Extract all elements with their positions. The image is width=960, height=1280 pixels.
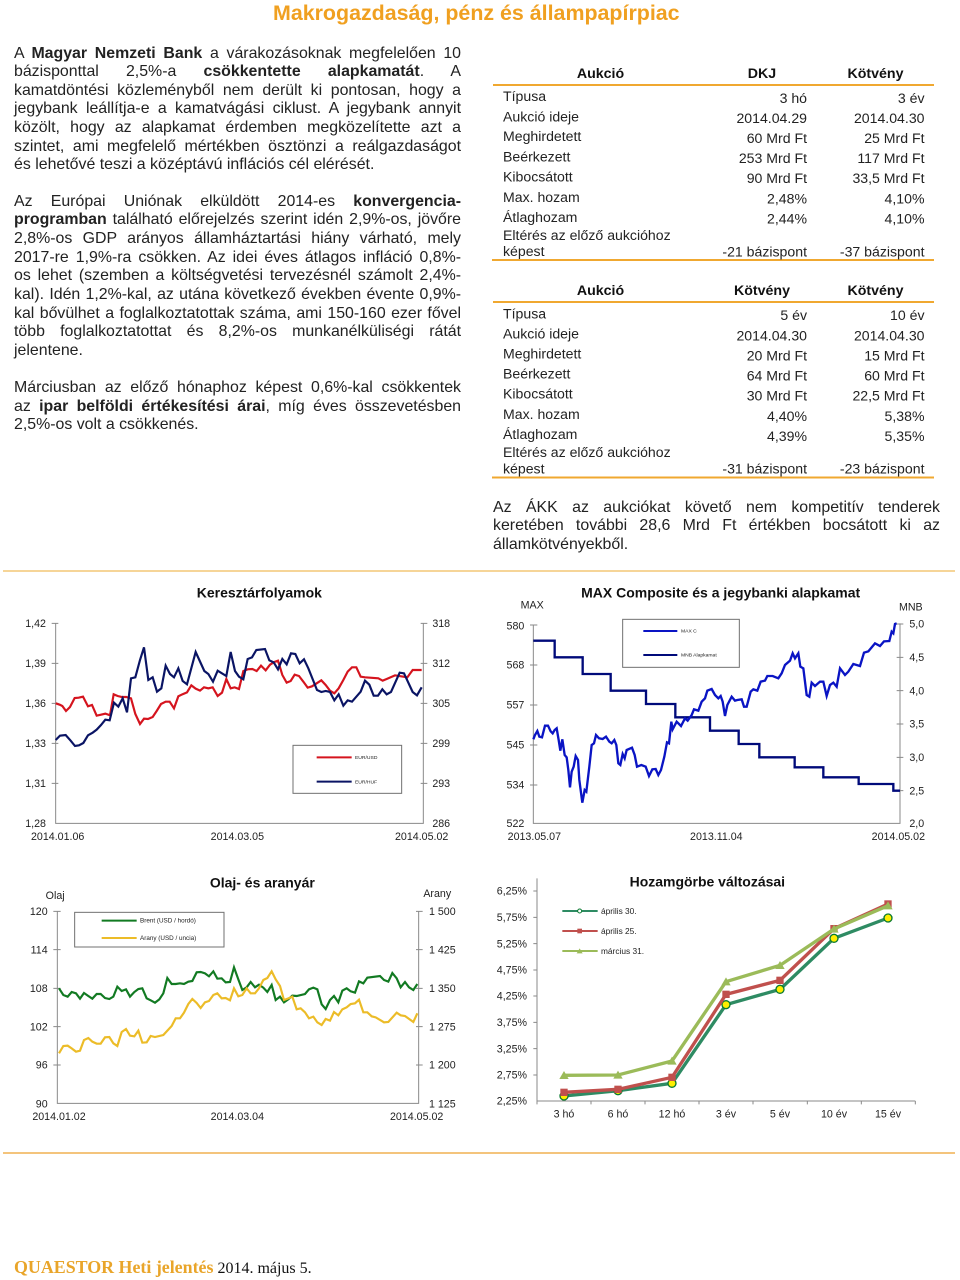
right axis labels — [909, 619, 924, 830]
right axis labels: 1 500 — [429, 906, 456, 918]
right axis labels: 305 — [432, 698, 450, 710]
left axis labels: 114 — [31, 944, 48, 956]
column 5-year values: 64 Mrd Ft — [747, 368, 807, 384]
legend: Brent (USD / hordó) — [140, 918, 196, 925]
date labels: 2014.05.02 — [390, 1111, 443, 1123]
column 5-year values: 20 Mrd Ft — [747, 347, 807, 363]
text block: MNB rate decision: szintet, ami megfelelő mértékben ösztönzi a reálgazdaságot — [14, 138, 461, 155]
right axis labels: 3,0 — [909, 752, 924, 764]
legend: április 30. — [601, 906, 637, 916]
date labels — [32, 1111, 443, 1123]
series: március 31. — [559, 901, 893, 1079]
chart title: Hozamgörbe változásai — [630, 874, 785, 890]
row labels: Kibocsátott — [503, 386, 573, 402]
left axis labels — [507, 620, 524, 830]
date labels — [508, 831, 925, 843]
text block: convergence programme: Az Európai Uniónak elküldött 2014-es konvergencia- — [14, 193, 461, 210]
left axis labels: 1,39 — [25, 658, 46, 670]
column 10-year values: 60 Mrd Ft — [864, 368, 925, 384]
x axis labels — [554, 1108, 902, 1120]
row labels: képest — [503, 243, 545, 259]
line: EUR/HUF — [56, 647, 422, 746]
text block: MNB rate decision — [14, 44, 461, 173]
legend — [623, 619, 739, 667]
left axis labels: 1,36 — [25, 698, 46, 710]
column 10-year values: 2014.04.30 — [854, 327, 925, 343]
table header: Aukció — [577, 66, 624, 82]
column DKJ values: 2,44% — [767, 210, 807, 226]
right axis labels: 286 — [432, 818, 450, 830]
right axis labels: 312 — [432, 658, 450, 670]
row labels — [503, 305, 671, 476]
column bond values: 4,10% — [885, 190, 925, 206]
right axis labels: 2,0 — [909, 818, 924, 830]
left axis labels — [25, 618, 46, 830]
left unit label: Olaj — [46, 890, 65, 902]
date labels: 2014.05.02 — [872, 831, 925, 843]
column 10-year values: 10 év — [890, 307, 924, 323]
row labels: Meghirdetett — [503, 128, 581, 144]
text block: convergence programme: kal bővülhet a foglalkoztatottak száma, ami 150-160 ezer fővel — [14, 305, 461, 322]
y axis labels: 5,25% — [497, 938, 528, 950]
row labels: Beérkezett — [503, 366, 570, 382]
right axis labels: 5,0 — [909, 619, 924, 631]
right unit label: MNB — [899, 602, 923, 614]
right axis labels — [429, 906, 456, 1110]
y axis labels: 3,75% — [497, 1017, 528, 1029]
row labels: Típusa — [503, 88, 546, 104]
column bond values: 117 Mrd Ft — [857, 150, 925, 166]
line: Brent — [59, 967, 417, 1009]
text block: convergence programme: kal). Idén 1,2%-kal, az utána következő években évente 0,9%- — [14, 286, 461, 303]
left axis labels: 568 — [507, 660, 524, 672]
row labels — [503, 88, 671, 259]
table header: Kötvény — [848, 66, 904, 82]
y axis labels: 2,75% — [497, 1070, 528, 1082]
row labels: Eltérés az előző aukcióhoz — [503, 227, 671, 243]
y axis labels: 6,25% — [497, 886, 528, 898]
right axis labels: 299 — [432, 738, 450, 750]
legend: március 31. — [601, 946, 644, 956]
text block: convergence programme: 2017-re 1,9%-ra csökken. Az idei éves átlagos infláció 0,8%- — [14, 249, 461, 266]
date labels: 2014.01.06 — [31, 831, 84, 843]
date labels: 2014.05.02 — [395, 831, 448, 843]
row labels: Átlaghozam — [503, 209, 577, 225]
left axis labels: 1,28 — [25, 818, 46, 830]
line: EUR/USD — [56, 661, 422, 724]
text block: industrial prices — [14, 379, 461, 433]
x axis labels: 6 hó — [608, 1108, 628, 1120]
table: bond auctions — [492, 283, 934, 478]
legend: Arany (USD / uncia) — [140, 935, 196, 942]
column 5-year values: -31 bázispont — [722, 461, 807, 477]
column bond values — [840, 90, 925, 260]
column 5-year values: 30 Mrd Ft — [747, 388, 807, 404]
chart: MAX Composite és a jegybanki alapkamat — [507, 584, 925, 843]
text block: convergence programme: jelentene. — [14, 342, 83, 359]
column bond values: 4,10% — [885, 210, 925, 226]
right axis labels: 1 125 — [429, 1098, 456, 1110]
x axis labels: 15 év — [875, 1108, 902, 1120]
column DKJ values: -21 bázispont — [722, 244, 807, 260]
date labels: 2013.05.07 — [508, 831, 561, 843]
legend: MAX C — [681, 629, 697, 635]
right axis labels: 2,5 — [909, 785, 924, 797]
text block: MNB rate decision: jegybank leállítja-e a kamatvágási ciklust. A jegybank annyit — [14, 100, 461, 117]
row labels: Beérkezett — [503, 148, 570, 164]
left axis labels: 102 — [30, 1021, 48, 1033]
left axis labels: 1,33 — [25, 738, 46, 750]
y axis labels — [497, 886, 528, 1108]
column 5-year values: 2014.04.30 — [736, 327, 807, 343]
text block: MNB rate decision: bázisponttal 2,5%-a csökkentette alapkamatát. A — [14, 63, 461, 80]
line: MNB base rate — [533, 641, 900, 791]
right axis labels: 4,5 — [909, 652, 924, 664]
column DKJ values: 3 hó — [780, 90, 807, 106]
legend: EUR/HUF — [355, 779, 377, 785]
chart: Hozamgörbe változásai — [497, 874, 915, 1120]
text block: convergence programme: több foglalkoztatottat és 8,2%-os munkanélküliségi rátát — [14, 323, 461, 340]
text block: non-competitive tenders: államkötvényekből. — [493, 536, 628, 553]
column 10-year values: 22,5 Mrd Ft — [852, 388, 925, 404]
x axis labels: 3 hó — [554, 1108, 574, 1120]
text block: industrial prices: 2,5%-os volt a csökkenés. — [14, 416, 199, 433]
x axis labels: 10 év — [821, 1108, 848, 1120]
column 10-year values — [840, 307, 925, 477]
legend: EUR/USD — [355, 755, 378, 761]
left axis labels: 108 — [30, 983, 48, 995]
right axis labels: 1 275 — [429, 1021, 456, 1033]
text block: convergence programme: 2,8%-os GDP arányos államháztartási hiány várható, mely — [14, 230, 461, 247]
table header: Kötvény — [848, 283, 904, 299]
column 10-year values: 5,38% — [885, 408, 925, 424]
column bond values: 3 év — [898, 90, 924, 106]
right axis labels: 3,5 — [909, 719, 924, 731]
column 10-year values: 5,35% — [885, 428, 925, 444]
right axis labels: 1 425 — [429, 944, 456, 956]
x axis labels: 12 hó — [659, 1108, 685, 1120]
text block: MNB rate decision: kamatdöntési közleményből nem derült ki pontosan, hogy a — [14, 82, 461, 99]
right unit label: Arany — [423, 888, 452, 900]
footer: QUAESTOR Heti jelentés 2014. május 5. — [14, 1257, 312, 1277]
right axis labels: 293 — [432, 778, 450, 790]
right axis labels: 318 — [432, 618, 450, 630]
date labels — [31, 831, 448, 843]
left axis labels: 90 — [36, 1098, 48, 1110]
text block: MNB rate decision: közölt, hogy az alapkamat érdemben megközelítette azt a — [14, 119, 461, 136]
text block: convergence programme — [14, 193, 461, 359]
left axis labels: 557 — [507, 700, 524, 712]
text block: convergence programme: programban található előrejelzés szerint idén 2,9%-os, jövőre — [14, 211, 461, 228]
right axis labels: 1 200 — [429, 1060, 456, 1072]
page title: Makrogazdaság, pénz és állampapírpiac — [273, 1, 680, 25]
series: április 30. — [560, 914, 892, 1100]
left axis labels: 1,42 — [25, 618, 46, 630]
right axis labels — [432, 618, 450, 830]
date labels: 2014.03.05 — [211, 831, 264, 843]
text block: MNB rate decision: és lehetővé teszi a középtávú inflációs cél elérését. — [14, 156, 374, 173]
date labels: 2013.11.04 — [690, 831, 743, 843]
column 5-year values — [722, 307, 807, 477]
y axis labels: 3,25% — [497, 1043, 528, 1055]
legend — [562, 906, 644, 956]
row labels: Aukció ideje — [503, 108, 579, 124]
column DKJ values: 2014.04.29 — [736, 110, 807, 126]
chart: Olaj- és aranyár — [30, 875, 456, 1123]
left axis labels: 1,31 — [25, 778, 46, 790]
chart title: Olaj- és aranyár — [210, 875, 315, 891]
table: DKJ and bond auctions — [492, 66, 934, 260]
column 5-year values: 4,39% — [767, 428, 807, 444]
left axis labels: 580 — [507, 620, 524, 632]
chart title: MAX Composite és a jegybanki alapkamat — [581, 584, 861, 600]
text block: MNB rate decision: A Magyar Nemzeti Bank a várakozásoknak megfelelően 10 — [14, 44, 461, 62]
column 10-year values: -23 bázispont — [840, 461, 925, 477]
line: gold — [59, 971, 417, 1053]
row labels: Meghirdetett — [503, 346, 581, 362]
table header — [577, 283, 904, 299]
column DKJ values: 2,48% — [767, 190, 807, 206]
column DKJ values: 253 Mrd Ft — [739, 150, 807, 166]
column bond values: -37 bázispont — [840, 244, 925, 260]
chart title: Keresztárfolyamok — [197, 584, 322, 600]
left unit label: MAX — [521, 600, 544, 612]
left axis labels: 96 — [36, 1060, 48, 1072]
left axis labels: 534 — [507, 780, 524, 792]
y axis labels: 2,25% — [497, 1096, 528, 1108]
row labels: Átlaghozam — [503, 426, 577, 442]
date labels: 2014.01.02 — [32, 1111, 86, 1123]
legend — [293, 745, 402, 793]
text block: non-competitive tenders: keretében további 28,6 Mrd Ft értékben bocsátott ki az — [493, 517, 940, 534]
y axis labels: 4,75% — [497, 965, 528, 977]
column 5-year values: 4,40% — [767, 408, 807, 424]
series: április 25. — [560, 900, 892, 1096]
x axis labels: 3 év — [716, 1108, 737, 1120]
left axis labels: 522 — [507, 818, 524, 830]
column 5-year values: 5 év — [780, 307, 807, 323]
table header: Kötvény — [734, 283, 790, 299]
left axis labels — [30, 906, 48, 1110]
row labels: Aukció ideje — [503, 326, 579, 342]
text block: industrial prices: Márciusban az előző hónaphoz képest 0,6%-kal csökkentek — [14, 379, 461, 396]
row labels: Max. hozam — [503, 406, 580, 422]
column 10-year values: 15 Mrd Ft — [864, 347, 925, 363]
text block: non-competitive tenders — [493, 498, 940, 553]
column DKJ values: 60 Mrd Ft — [747, 130, 807, 146]
row labels: Max. hozam — [503, 189, 580, 205]
table header: DKJ — [748, 66, 776, 82]
legend — [75, 912, 224, 947]
column bond values: 33,5 Mrd Ft — [852, 170, 925, 186]
column DKJ values — [722, 90, 807, 260]
legend: MNB Alapkamat — [681, 653, 717, 659]
right axis labels: 4,0 — [909, 685, 924, 697]
row labels: képest — [503, 460, 545, 476]
right axis labels: 1 350 — [429, 983, 456, 995]
table header — [577, 66, 904, 82]
column DKJ values: 90 Mrd Ft — [747, 170, 807, 186]
row labels: Típusa — [503, 305, 546, 321]
row labels: Eltérés az előző aukcióhoz — [503, 444, 671, 460]
text block: non-competitive tenders: Az ÁKK az aukciókat követő nem kompetitív tenderek — [493, 498, 940, 516]
text block: industrial prices: az ipar belföldi értékesítési árai, míg éves összevetésben — [14, 398, 461, 415]
row labels: Kibocsátott — [503, 169, 573, 185]
date labels: 2014.03.04 — [211, 1111, 264, 1123]
x axis labels: 5 év — [770, 1108, 791, 1120]
chart: Keresztárfolyamok — [25, 584, 450, 843]
legend: április 25. — [601, 926, 637, 936]
left axis labels: 545 — [507, 740, 524, 752]
line: MAX Composite — [533, 623, 897, 803]
column bond values: 25 Mrd Ft — [864, 130, 925, 146]
text block: convergence programme: os lehet (szemben a költségvetési tervezésnél számolt 2,4%- — [14, 267, 461, 284]
table header: Aukció — [577, 283, 624, 299]
left axis labels: 120 — [30, 906, 48, 918]
column bond values: 2014.04.30 — [854, 110, 925, 126]
y axis labels: 5,75% — [497, 912, 528, 924]
y axis labels: 4,25% — [497, 991, 528, 1003]
